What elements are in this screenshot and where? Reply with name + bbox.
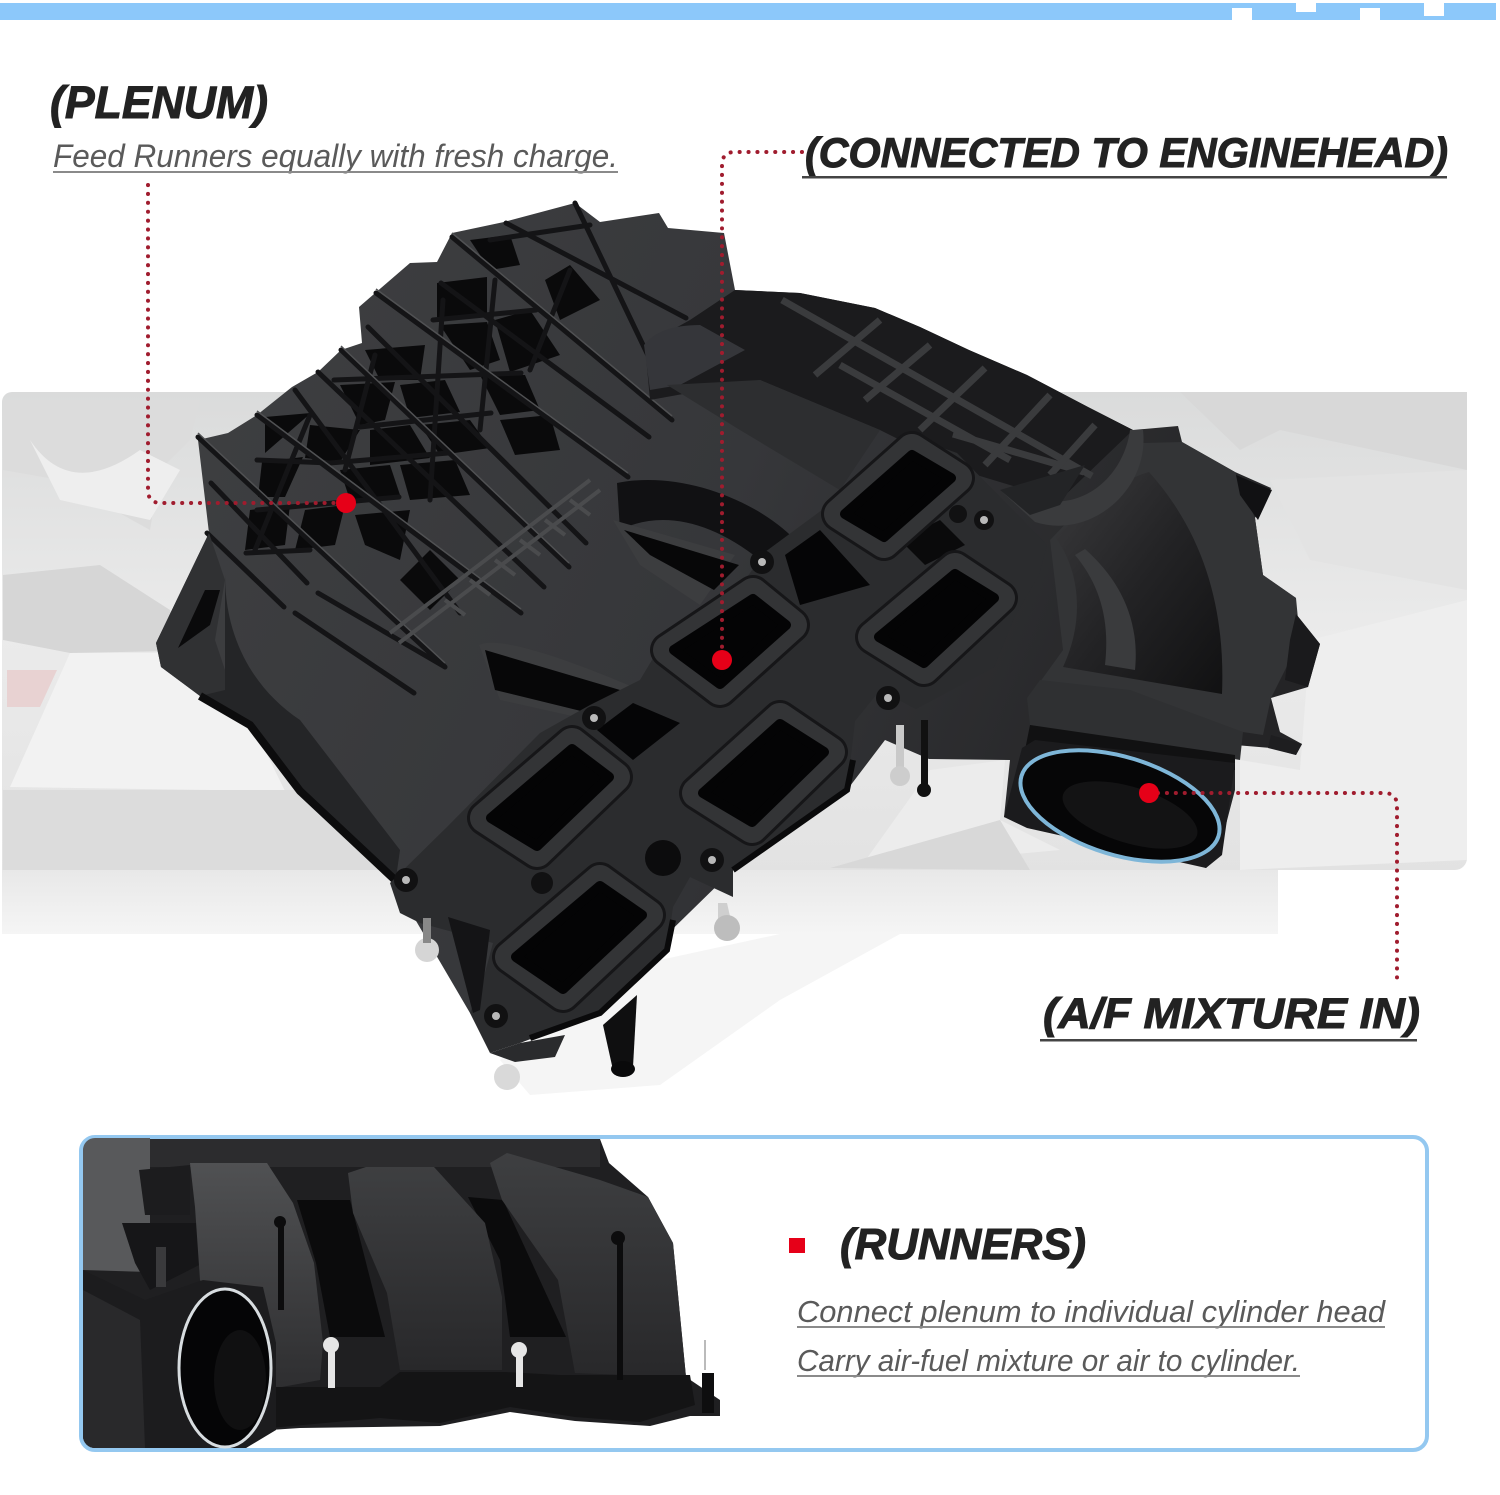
text: plenum description: Feed Runners equally with fresh charge. (53, 138, 618, 174)
throttle body plate (1004, 740, 1235, 868)
heading: connected to engine head: (CONNECTED TO ENGINEHEAD) (805, 129, 1448, 176)
soft ground shadow (500, 934, 900, 1095)
port rims and openings (485, 449, 1000, 995)
corrugated band (390, 480, 600, 643)
under-flange legs (448, 917, 490, 1013)
duct rib strip (782, 300, 1095, 476)
heading: A/F mixture in: (A/F MIXTURE IN) (1043, 990, 1420, 1038)
top blue bar (0, 3, 1496, 20)
throttle collar (1027, 680, 1243, 760)
callout line: A/F mixture (1139, 783, 1397, 985)
text: runners line two: Carry air-fuel mixture or air to cylinder. (797, 1343, 1300, 1378)
runners photo (83, 1138, 720, 1448)
elbow frame (1027, 442, 1300, 735)
heading: plenum: (PLENUM) (50, 77, 268, 128)
icon: red square bullet (789, 1238, 805, 1253)
sensor nubs (1236, 475, 1272, 520)
upper duct (645, 290, 1133, 500)
elbow collar (1000, 430, 1144, 526)
flange windows (597, 703, 680, 760)
gasket layers (530, 760, 853, 1038)
manifold product photo (156, 203, 1320, 1095)
lattice pockets (245, 235, 600, 610)
callout line: engine head (712, 152, 802, 670)
background panel: engine bay photo (2, 392, 1467, 934)
plenum body outline (156, 203, 1320, 1040)
bolts and studs (394, 505, 994, 1090)
callout line: plenum (148, 185, 356, 513)
central channels and slits (617, 480, 800, 560)
elbow tube (1055, 472, 1222, 694)
plenum side edge (156, 533, 235, 700)
heading: runners: (RUNNERS) (840, 1220, 1086, 1269)
panel: runners (81, 1137, 1427, 1450)
text: runners line one: Connect plenum to individual cylinder head (797, 1294, 1387, 1329)
injector flange (390, 434, 1047, 1053)
lattice ribs (198, 203, 686, 693)
